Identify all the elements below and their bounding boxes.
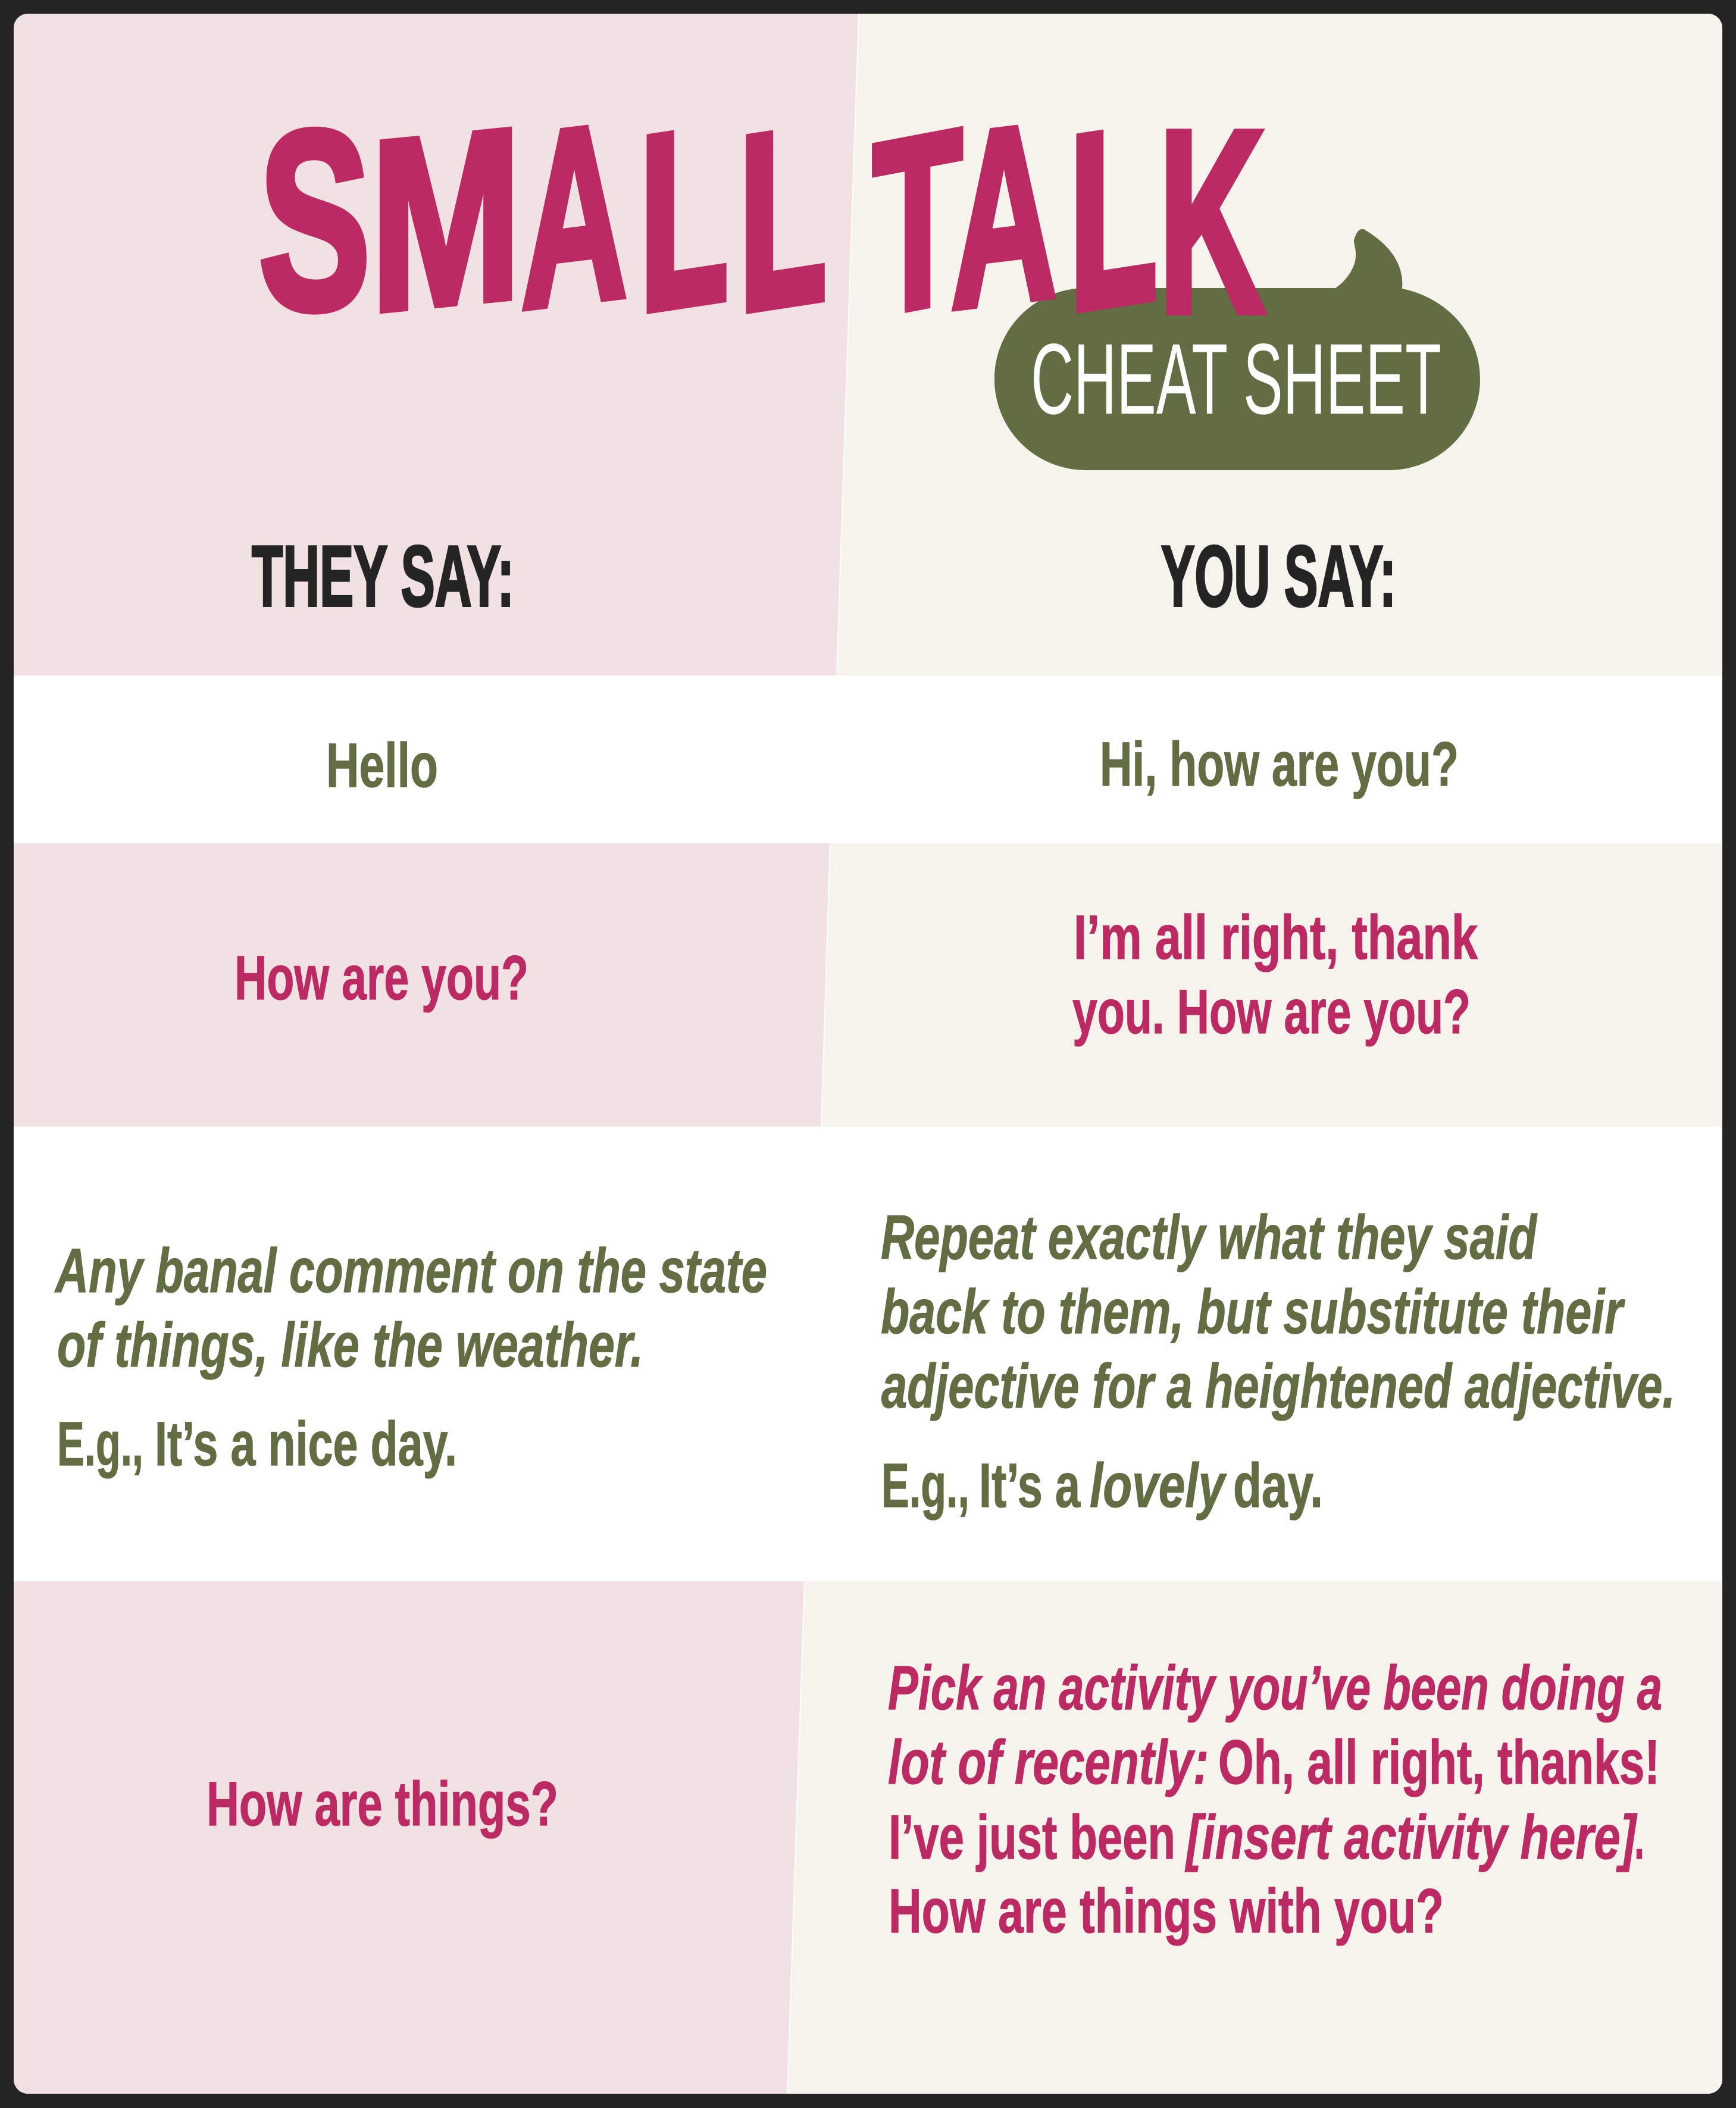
row 2 you say (1072, 903, 1478, 1047)
panel: row 2 you say (822, 843, 1722, 1127)
row 3 they say: It’s a nice day. (155, 1409, 457, 1479)
title: L (740, 76, 825, 361)
speech bubble (994, 229, 1480, 470)
title (259, 70, 1265, 368)
row 1 you say: Hi, how are you? (1100, 730, 1459, 799)
row 2 they say: How are you? (234, 943, 528, 1013)
heading: you say: YOU SAY: (1161, 528, 1396, 624)
row 2 you say: I’m all right, thank (1074, 903, 1478, 972)
row 3 you say: day. (1233, 1451, 1323, 1521)
row 3 you say: E.g., (881, 1451, 969, 1521)
panel: row 4 you say (788, 1581, 1722, 2094)
row 3 they say: E.g., (57, 1409, 143, 1479)
row 3 you say: lovely (1090, 1451, 1227, 1521)
title: S (259, 78, 371, 362)
row 3 they say: of things, like the weather. (57, 1311, 643, 1380)
title: A (951, 70, 1057, 362)
title: L (1071, 75, 1156, 361)
panel: header you say (837, 14, 1722, 675)
row 3 you say (881, 1203, 1675, 1521)
title: L (641, 76, 727, 361)
row 3 they say: Any banal comment on the state (54, 1236, 767, 1306)
subtitle: cheat sheet: CHEAT SHEET (1031, 323, 1441, 435)
row 3 they say (54, 1236, 767, 1479)
row 2 you say: you. How are you? (1072, 977, 1471, 1047)
panel: row 4 they say (14, 1581, 804, 2094)
row 4 you say: . (1634, 1803, 1644, 1872)
heading: they say: THEY SAY: (252, 528, 514, 624)
panel: header they say (14, 14, 858, 675)
row 4 you say: I’ve just been (889, 1803, 1175, 1872)
panel: row 2 they say (14, 843, 830, 1127)
title: K (1159, 77, 1265, 367)
row 4 you say (888, 1653, 1662, 1946)
title: M (370, 77, 521, 363)
title: A (521, 70, 627, 362)
row 4 they say: How are things? (207, 1769, 558, 1839)
title: T (872, 77, 962, 368)
row 4 you say: lot of recently: (888, 1728, 1209, 1797)
row 3 you say: It’s a (979, 1451, 1081, 1521)
row 1 they say: hello: Hello (326, 731, 438, 800)
row 4 you say: How are things with you? (889, 1876, 1444, 1946)
